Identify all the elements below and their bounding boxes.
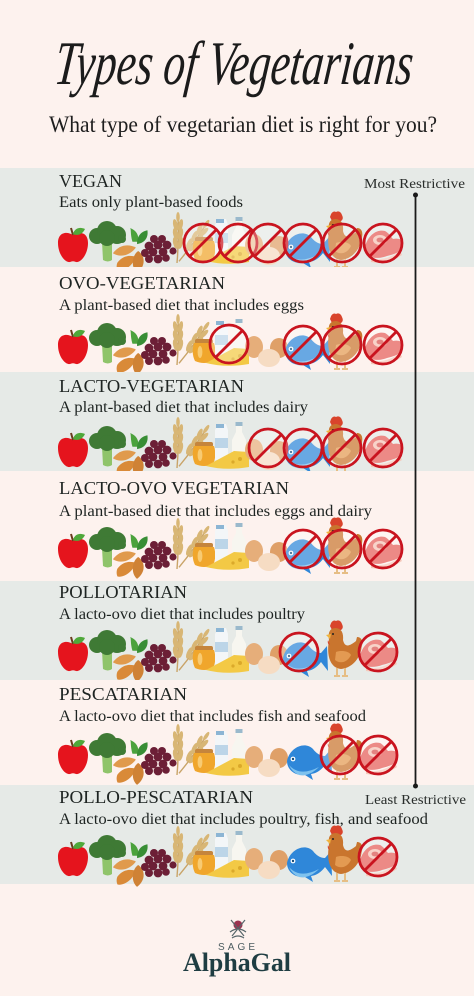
panel: vegan [0, 168, 474, 273]
heading: pescatarian: PESCATARIAN [59, 684, 187, 704]
icon row: vegan foods [58, 211, 403, 273]
description: lacto-vegetarian: A plant-based diet that includes dairy [59, 399, 308, 416]
icon: logo mark [230, 920, 246, 938]
panel: pollo-pescatarian [0, 785, 474, 887]
description: vegan: Eats only plant-based foods [59, 194, 243, 211]
icon row: pollotarian foods [58, 620, 398, 682]
icon row: pescatarian foods [58, 723, 398, 785]
logo text: alphagal: AlphaGal [183, 948, 291, 977]
description: lacto-ovo vegetarian: A plant-based diet that includes eggs and dairy [59, 503, 372, 520]
logo text: sage: SAGE [218, 942, 255, 953]
description: pollotarian: A lacto-ovo diet that includes poultry [59, 606, 305, 623]
logo: Sage AlphaGal [183, 920, 291, 977]
icon row: lacto-ovo foods [58, 517, 403, 579]
icon row: pollo-pescatarian foods [58, 825, 398, 887]
icon row: ovo-vegetarian foods [58, 313, 403, 375]
description: pescatarian: A lacto-ovo diet that includes fish and seafood [59, 708, 366, 725]
heading: vegan: VEGAN [59, 171, 122, 191]
panel: ovo-vegetarian [0, 267, 474, 375]
heading: pollotarian: POLLOTARIAN [59, 582, 187, 602]
subtitle: What type of vegetarian diet is right for you? [49, 112, 437, 137]
panel: pollotarian [0, 581, 474, 682]
description: pollo-pescatarian: A lacto-ovo diet that includes poultry, fish, and seafood [59, 811, 428, 828]
icon row: lacto-vegetarian foods [58, 416, 403, 478]
arrow: restrictiveness scale [413, 192, 418, 788]
heading: lacto-ovo vegetarian: LACTO-OVO VEGETARIAN [59, 478, 289, 498]
label: most restrictive: Most Restrictive [364, 176, 465, 191]
panel: lacto-ovo vegetarian [0, 471, 474, 581]
panel: lacto-vegetarian [0, 372, 474, 478]
heading: lacto-vegetarian: LACTO-VEGETARIAN [59, 376, 244, 396]
label: least restrictive: Least Restrictive [365, 792, 466, 807]
heading: ovo-vegetarian: OVO-VEGETARIAN [59, 273, 225, 293]
panel: pescatarian [0, 680, 474, 785]
heading: pollo-pescatarian: POLLO-PESCATARIAN [59, 787, 253, 807]
description: ovo-vegetarian: A plant-based diet that includes eggs [59, 297, 304, 314]
